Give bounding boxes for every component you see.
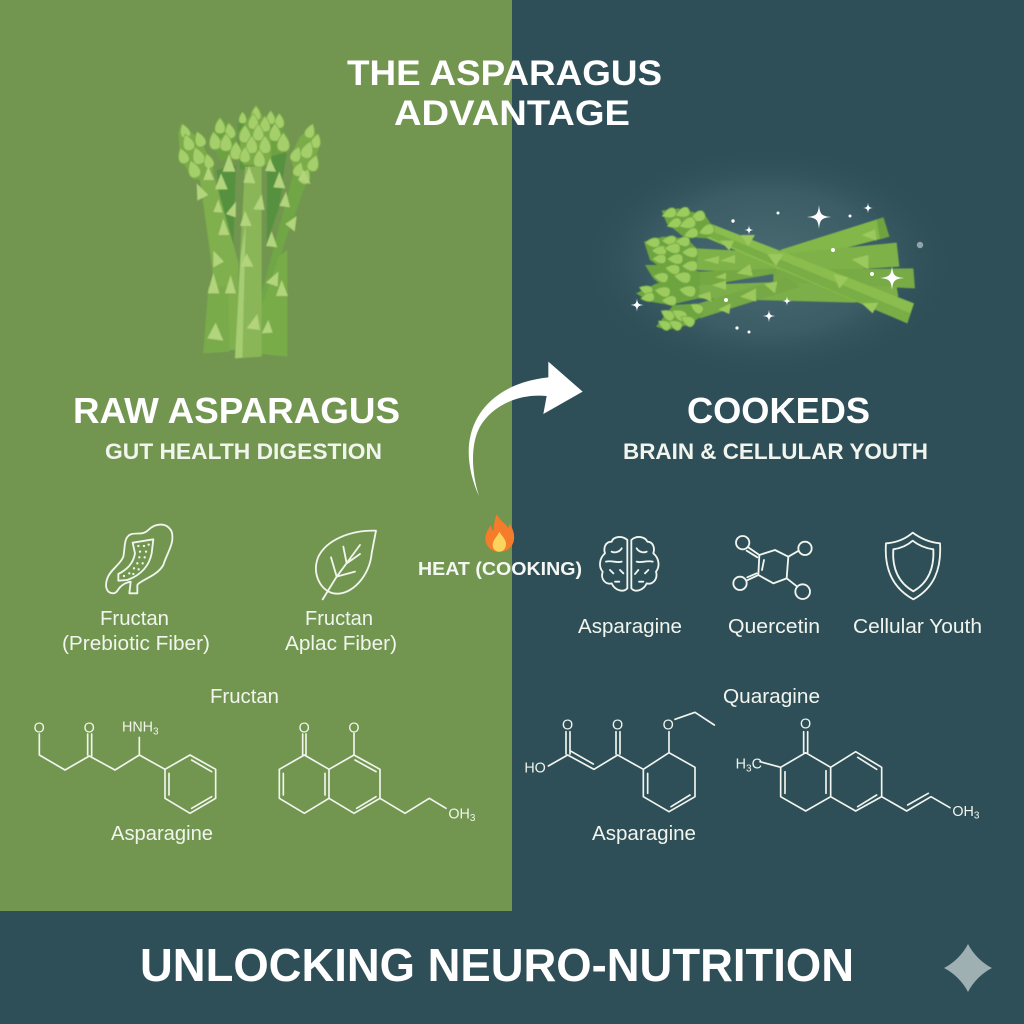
molecule: right fused rings — [736, 717, 980, 822]
label: fructan aplac fiber: Fructan — [305, 608, 373, 630]
panel: cooked (right) background — [512, 0, 1024, 911]
icon: four-point star — [944, 944, 992, 992]
icon: gut — [106, 525, 172, 593]
sparkles — [630, 203, 923, 334]
molecule: right chain with ring: O — [663, 718, 674, 734]
footer band — [0, 911, 1024, 1024]
molecule: left chain with benzene: 3 — [153, 726, 159, 737]
molecule: left fused rings — [279, 720, 476, 824]
heading: raw asparagus: RAW ASPARAGUS — [73, 390, 400, 431]
molecule: left fused rings: 3 — [470, 813, 476, 824]
molecule: right fused rings: O — [800, 717, 811, 733]
molecule: right chain with ring — [524, 712, 714, 812]
molecule: left chain with benzene: O — [34, 720, 45, 736]
cooked spears — [636, 206, 915, 332]
label: cellular youth: Cellular Youth — [853, 616, 982, 638]
illustration: raw asparagus bunch — [175, 106, 323, 358]
label: asparagine right: Asparagine — [592, 823, 696, 845]
label: fructan prebiotic fiber: Fructan — [100, 608, 169, 630]
subheading: gut health: GUT HEALTH DIGESTION — [105, 439, 382, 464]
panel: raw (left) background — [0, 0, 512, 911]
molecule: right fused rings: C — [752, 757, 762, 773]
footer headline: UNLOCKING NEURO-NUTRITION — [140, 939, 854, 991]
label: fructan prebiotic fiber — [62, 608, 210, 655]
label: quaragine: Quaragine — [723, 686, 820, 708]
label: fructan prebiotic fiber: (Prebiotic Fiber) — [62, 633, 210, 655]
molecule: right chain with ring: HO — [524, 760, 546, 776]
molecule: left fused rings: O — [348, 720, 359, 736]
glow behind cooked asparagus — [578, 144, 958, 380]
label: fructan aplac fiber: Aplac Fiber) — [285, 633, 397, 655]
arrow: raw to cooked — [469, 362, 583, 496]
label: asparagine left: Asparagine — [111, 823, 213, 845]
molecule: left fused rings: O — [299, 720, 310, 736]
icon: flame — [485, 514, 514, 552]
label: heat (cooking): HEAT (COOKING) — [418, 559, 582, 579]
subheading: brain and cellular youth: BRAIN & CELLULAR YOUTH — [623, 439, 928, 464]
illustration: cooked asparagus with sparkles — [578, 144, 958, 380]
icon: brain — [600, 537, 659, 591]
title: THE ASPARAGUS — [347, 54, 662, 93]
molecule: right fused rings: 3 — [746, 763, 752, 774]
molecule: right chain with ring: O — [612, 718, 623, 734]
icon: molecule — [733, 536, 812, 599]
label: quercetin: Quercetin — [728, 616, 820, 638]
title: ADVANTAGE — [394, 94, 630, 133]
title — [347, 54, 662, 133]
molecule: right chain with ring: O — [562, 718, 573, 734]
molecule: left chain with benzene: HNH — [122, 720, 153, 736]
molecule: left chain with benzene — [34, 720, 216, 813]
molecule: left chain with benzene: O — [84, 720, 95, 736]
molecule: right fused rings: H — [736, 757, 746, 773]
label: asparagine: Asparagine — [578, 616, 682, 638]
molecule: right fused rings: OH — [952, 804, 974, 820]
icon: shield — [886, 533, 940, 599]
heading: cooked: COOKEDS — [687, 390, 870, 431]
label: fructan aplac fiber — [285, 608, 397, 655]
icon: leaf — [316, 531, 376, 599]
molecule: left fused rings: OH — [448, 806, 470, 822]
label: fructan: Fructan — [210, 686, 279, 708]
molecule: right fused rings: 3 — [974, 811, 980, 822]
